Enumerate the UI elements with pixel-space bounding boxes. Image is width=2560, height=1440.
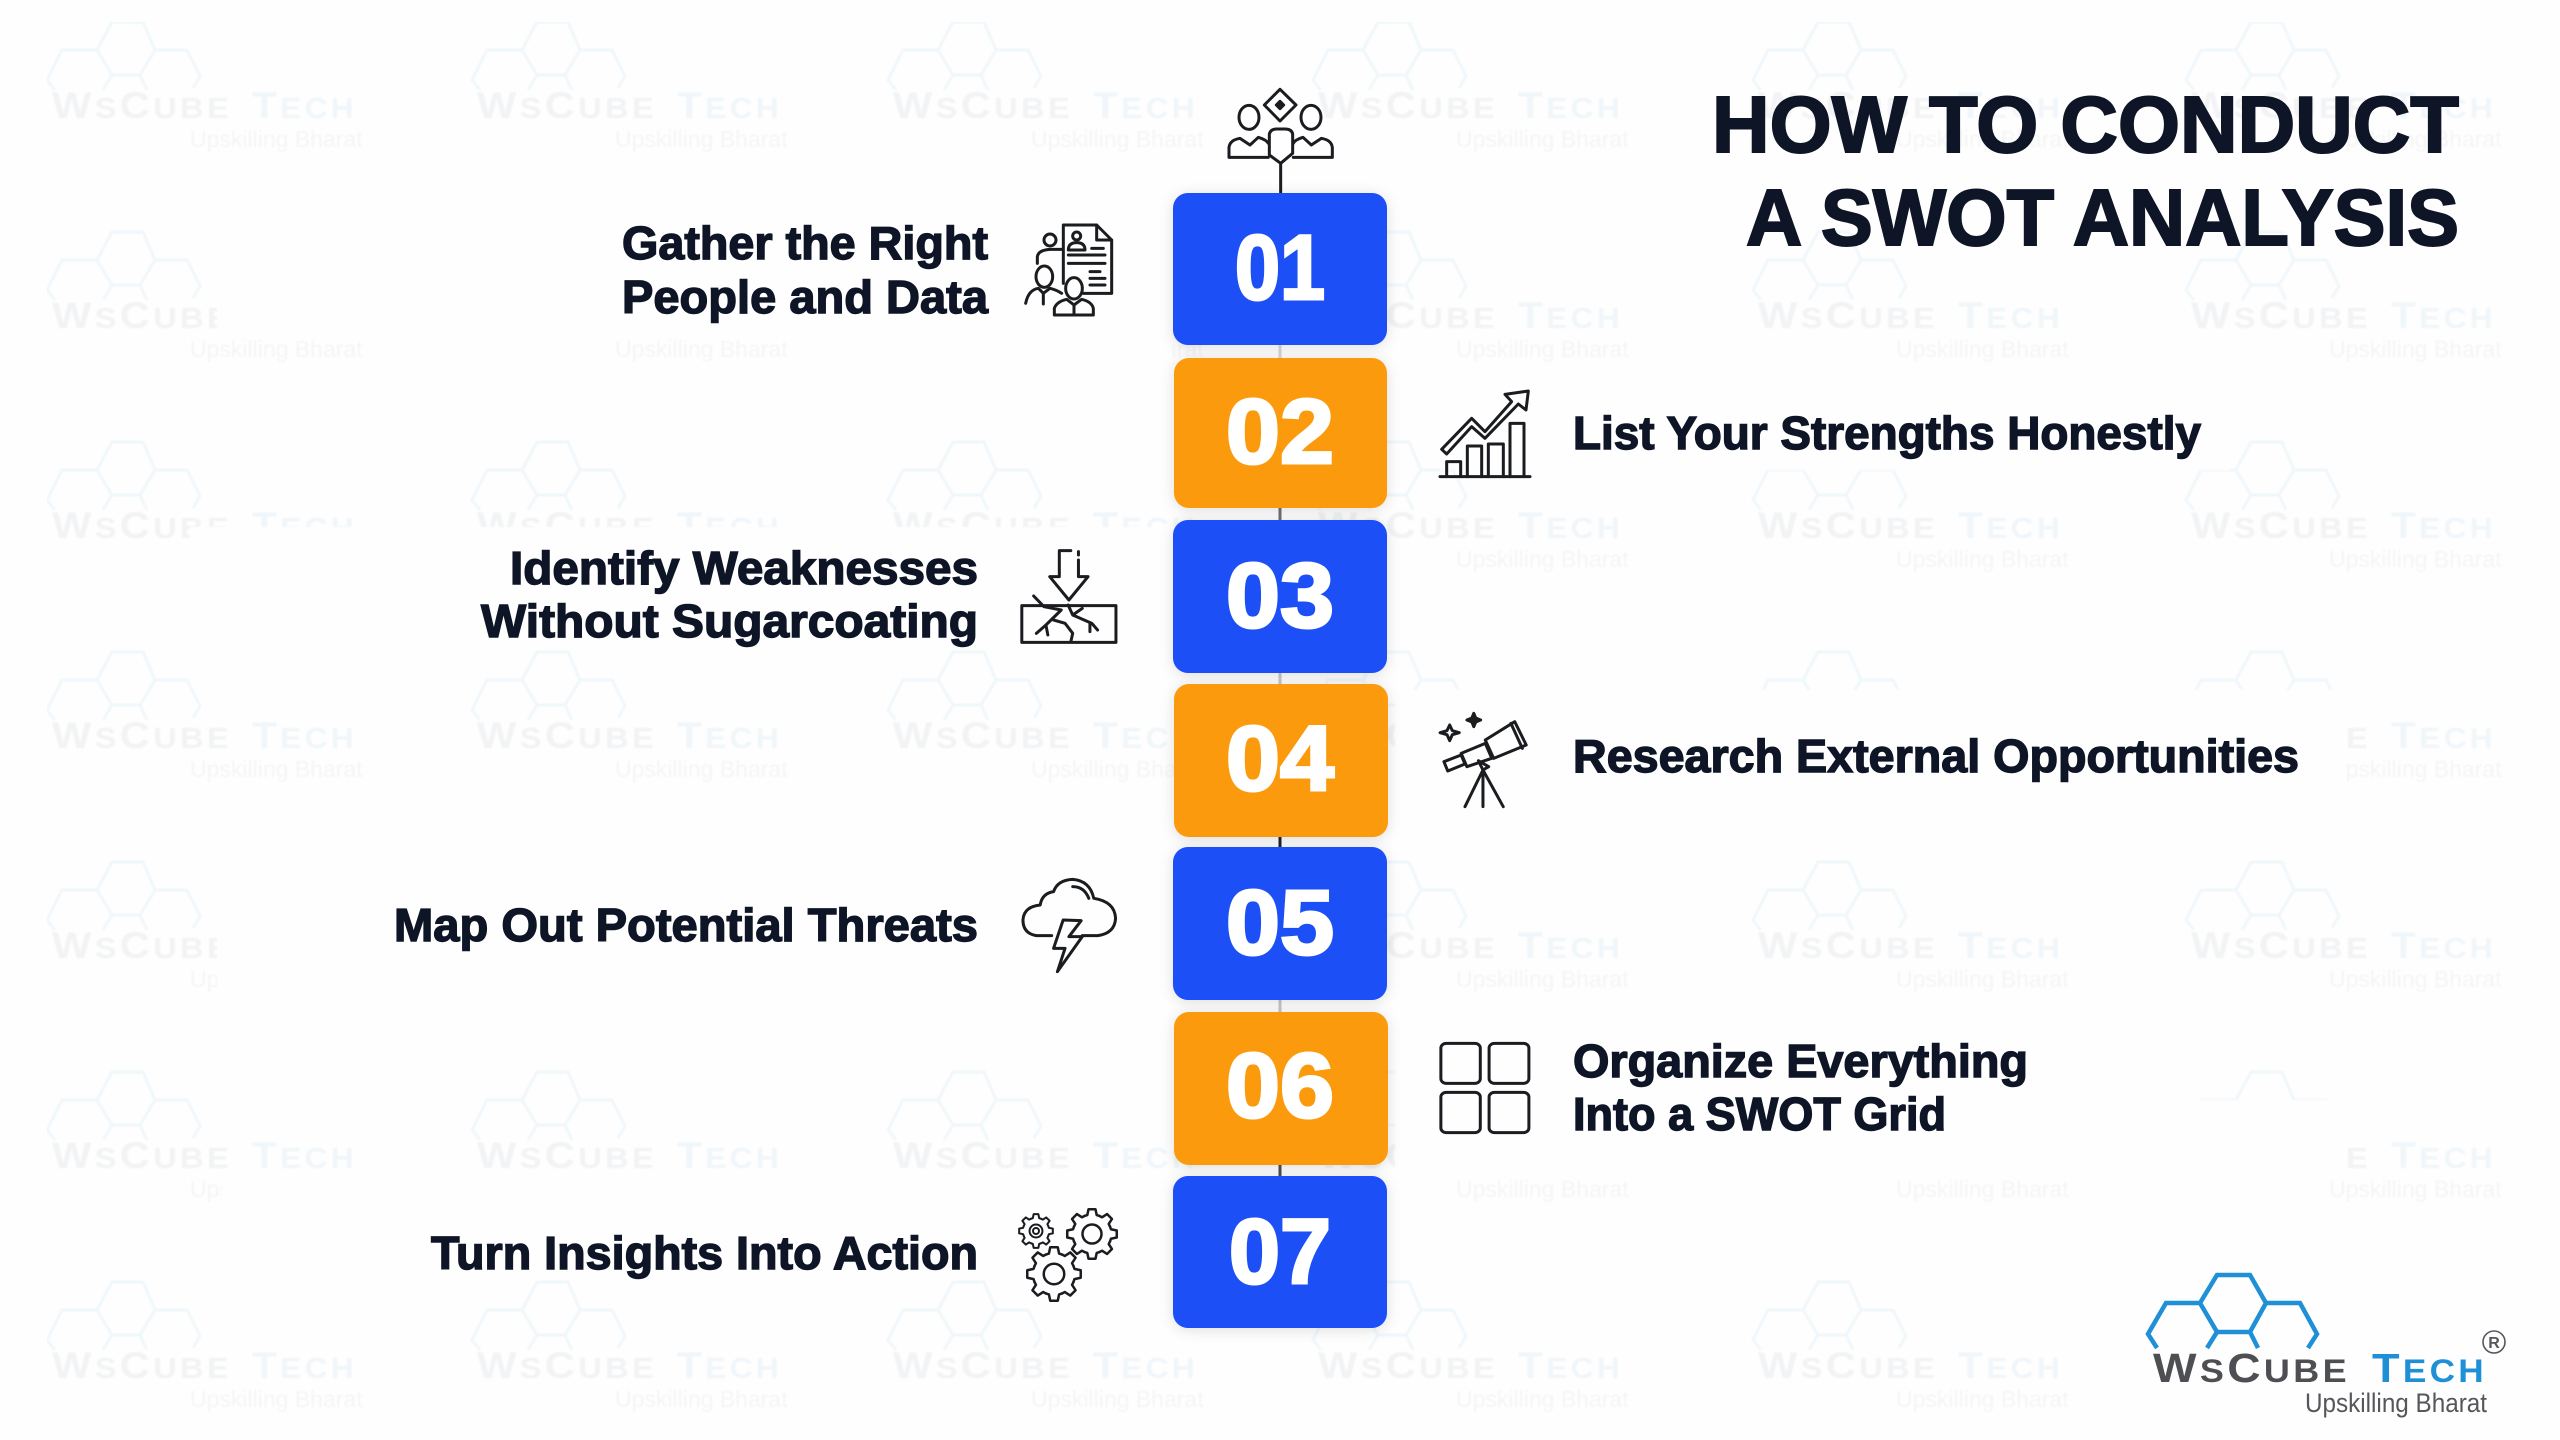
text: WSCUBE bbox=[52, 1345, 232, 1386]
step 02 box bbox=[1174, 358, 1387, 508]
text: Upskilling Bharat bbox=[190, 126, 363, 152]
text: WSCUBE bbox=[2191, 85, 2371, 126]
text: WSCUBE bbox=[893, 715, 1073, 756]
step 02 box: 02 bbox=[1226, 381, 1334, 483]
step 04 box: 04 bbox=[1226, 708, 1334, 810]
label: step 05: Map Out Potential Threats bbox=[394, 899, 978, 951]
text: WSCUBE bbox=[893, 1345, 1073, 1386]
text: WSCUBE bbox=[477, 85, 657, 126]
text: TECH bbox=[1518, 85, 1623, 126]
label: step 03: Identify Weaknesses bbox=[510, 542, 978, 594]
text: Upskilling Bharat bbox=[190, 756, 363, 782]
text: Upskilling Bharat bbox=[1896, 756, 2069, 782]
label: step 02: List Your Strengths Honestly bbox=[1573, 407, 2201, 459]
text: WSCUBE bbox=[1318, 1345, 1498, 1386]
text: WSCUBE bbox=[1318, 925, 1498, 966]
text: TECH bbox=[1518, 925, 1623, 966]
text: Upskilling Bharat bbox=[615, 546, 788, 572]
text: WSCUBE bbox=[1758, 295, 1938, 336]
text: TECH bbox=[1093, 925, 1198, 966]
text: TECH bbox=[1958, 505, 2063, 546]
text: Upskilling Bharat bbox=[2329, 336, 2502, 362]
text: Upskilling Bharat bbox=[1896, 336, 2069, 362]
step 06 box bbox=[1174, 1012, 1388, 1165]
text: TECH bbox=[1093, 1345, 1198, 1386]
logo: WsCube Tech: TECH bbox=[2372, 1345, 2487, 1391]
text: WSCUBE bbox=[893, 1135, 1073, 1176]
text: WSCUBE bbox=[1758, 505, 1938, 546]
label: step 06: Organize Everything bbox=[1573, 1035, 2028, 1087]
text: Upskilling Bharat bbox=[1456, 1386, 1629, 1412]
text: TECH bbox=[1093, 1135, 1198, 1176]
text: Upskilling Bharat bbox=[615, 966, 788, 992]
text: Upskilling Bharat bbox=[2329, 1386, 2502, 1412]
text: WSCUBE bbox=[2191, 925, 2371, 966]
text: WSCUBE bbox=[1758, 85, 1938, 126]
text: Upskilling Bharat bbox=[1456, 546, 1629, 572]
text: Upskilling Bharat bbox=[2329, 756, 2502, 782]
text: WSCUBE bbox=[1318, 1135, 1498, 1176]
text: WSCUBE bbox=[1758, 925, 1938, 966]
text: TECH bbox=[2391, 925, 2496, 966]
text: Upskilling Bharat bbox=[190, 336, 363, 362]
text: Upskilling Bharat bbox=[2329, 1176, 2502, 1202]
text: Upskilling Bharat bbox=[1031, 1176, 1204, 1202]
icon: team with diamond bbox=[1229, 89, 1332, 193]
text: WSCUBE bbox=[1318, 715, 1498, 756]
text: TECH bbox=[677, 295, 782, 336]
text: Upskilling Bharat bbox=[1896, 1386, 2069, 1412]
text: WSCUBE bbox=[2191, 1345, 2371, 1386]
step 01 box: 01 bbox=[1235, 217, 1325, 319]
text: WSCUBE bbox=[477, 715, 657, 756]
text: TECH bbox=[677, 505, 782, 546]
text: TECH bbox=[2391, 505, 2496, 546]
text: Upskilling Bharat bbox=[2329, 126, 2502, 152]
text: TECH bbox=[677, 715, 782, 756]
text: WSCUBE bbox=[52, 505, 232, 546]
text: TECH bbox=[2391, 1135, 2496, 1176]
text: Upskilling Bharat bbox=[615, 1386, 788, 1412]
text: WSCUBE bbox=[52, 925, 232, 966]
label: step 03 bbox=[481, 542, 978, 647]
text: WSCUBE bbox=[893, 925, 1073, 966]
text: WSCUBE bbox=[1318, 295, 1498, 336]
label: step 07: Turn Insights Into Action bbox=[431, 1227, 978, 1279]
step 05 box bbox=[1173, 847, 1387, 1000]
text: Upskilling Bharat bbox=[615, 756, 788, 782]
step 07 box: 07 bbox=[1229, 1201, 1331, 1303]
text: Upskilling Bharat bbox=[1456, 966, 1629, 992]
text: WSCUBE bbox=[893, 295, 1073, 336]
label: step 01: People and Data bbox=[622, 271, 988, 323]
text: WSCUBE bbox=[1758, 1135, 1938, 1176]
text: TECH bbox=[252, 295, 357, 336]
text: TECH bbox=[252, 505, 357, 546]
text: WSCUBE bbox=[1318, 505, 1498, 546]
step 06 box: 06 bbox=[1226, 1035, 1334, 1137]
text: TECH bbox=[2391, 85, 2496, 126]
label: step 06 bbox=[1573, 1035, 2028, 1140]
text: TECH bbox=[677, 1135, 782, 1176]
text: Upskilling Bharat bbox=[1896, 546, 2069, 572]
text: Upskilling Bharat bbox=[190, 966, 363, 992]
text: WSCUBE bbox=[477, 295, 657, 336]
logo: WsCube Tech: R bbox=[2488, 1335, 2500, 1352]
text: TECH bbox=[1093, 505, 1198, 546]
step 07 box bbox=[1173, 1176, 1387, 1328]
step 03 box: 03 bbox=[1226, 545, 1334, 647]
text: WSCUBE bbox=[2191, 1135, 2371, 1176]
text: WSCUBE bbox=[52, 715, 232, 756]
step 05 box: 05 bbox=[1226, 872, 1334, 974]
label: step 06: Into a SWOT Grid bbox=[1573, 1088, 1946, 1140]
text: TECH bbox=[1518, 715, 1623, 756]
text: Upskilling Bharat bbox=[1031, 546, 1204, 572]
title: A SWOT ANALYSIS bbox=[1746, 173, 2459, 262]
text: TECH bbox=[252, 1345, 357, 1386]
text: WSCUBE bbox=[477, 925, 657, 966]
label: step 04: Research External Opportunities bbox=[1573, 730, 2299, 782]
text: Upskilling Bharat bbox=[1031, 1386, 1204, 1412]
text: TECH bbox=[1093, 715, 1198, 756]
icon: arrow cracking a block bbox=[1022, 551, 1116, 642]
title bbox=[1712, 80, 2459, 262]
label: step 01: Gather the Right bbox=[622, 217, 988, 269]
icon: people with document bbox=[1026, 225, 1112, 315]
text: Upskilling Bharat bbox=[615, 1176, 788, 1202]
text: TECH bbox=[2391, 1345, 2496, 1386]
text: TECH bbox=[1093, 295, 1198, 336]
text: WSCUBE bbox=[477, 1135, 657, 1176]
text: Upskilling Bharat bbox=[1456, 756, 1629, 782]
text: TECH bbox=[1958, 1135, 2063, 1176]
text: TECH bbox=[1518, 295, 1623, 336]
text: TECH bbox=[677, 1345, 782, 1386]
icon: rising chart bbox=[1440, 391, 1530, 477]
text: WSCUBE bbox=[2191, 505, 2371, 546]
text: Upskilling Bharat bbox=[2329, 546, 2502, 572]
icon: telescope and stars bbox=[1440, 713, 1526, 807]
text: Upskilling Bharat bbox=[2329, 966, 2502, 992]
text: Upskilling Bharat bbox=[1031, 126, 1204, 152]
step 03 box bbox=[1173, 520, 1387, 673]
text: TECH bbox=[2391, 295, 2496, 336]
text: TECH bbox=[677, 925, 782, 966]
text: TECH bbox=[2391, 715, 2496, 756]
text: TECH bbox=[1093, 85, 1198, 126]
text: Upskilling Bharat bbox=[1896, 126, 2069, 152]
text: WSCUBE bbox=[893, 505, 1073, 546]
text: TECH bbox=[1518, 1345, 1623, 1386]
text: TECH bbox=[1958, 85, 2063, 126]
logo: WsCube Tech: Upskilling Bharat bbox=[2305, 1388, 2487, 1418]
text: WSCUBE bbox=[1758, 1345, 1938, 1386]
text: WSCUBE bbox=[1318, 85, 1498, 126]
logo: WsCube Tech: WSCUBE bbox=[2153, 1345, 2350, 1391]
title: HOW TO CONDUCT bbox=[1712, 80, 2459, 169]
text: TECH bbox=[1518, 505, 1623, 546]
text: TECH bbox=[1518, 1135, 1623, 1176]
text: Upskilling Bharat bbox=[1896, 1176, 2069, 1202]
text: TECH bbox=[252, 85, 357, 126]
text: TECH bbox=[252, 715, 357, 756]
text: WSCUBE bbox=[477, 1345, 657, 1386]
text: Upskilling Bharat bbox=[1456, 1176, 1629, 1202]
label: step 01 bbox=[622, 217, 988, 323]
label: step 03: Without Sugarcoating bbox=[481, 595, 978, 647]
text: TECH bbox=[252, 1135, 357, 1176]
text: TECH bbox=[1958, 1345, 2063, 1386]
step 04 box bbox=[1174, 684, 1388, 837]
text: Upskilling Bharat bbox=[1031, 756, 1204, 782]
text: WSCUBE bbox=[52, 1135, 232, 1176]
text: TECH bbox=[252, 925, 357, 966]
text: WSCUBE bbox=[1758, 715, 1938, 756]
text: WSCUBE bbox=[477, 505, 657, 546]
text: Upskilling Bharat bbox=[1456, 126, 1629, 152]
text: WSCUBE bbox=[893, 85, 1073, 126]
text: TECH bbox=[677, 85, 782, 126]
text: Upskilling Bharat bbox=[190, 546, 363, 572]
text: Upskilling Bharat bbox=[1031, 966, 1204, 992]
logo: WsCube Tech bbox=[2148, 1275, 2505, 1418]
icon: four-square grid bbox=[1441, 1043, 1529, 1133]
icon: storm cloud bbox=[1023, 879, 1116, 972]
text: Upskilling Bharat bbox=[1456, 336, 1629, 362]
text: Upskilling Bharat bbox=[190, 1176, 363, 1202]
step 01 box bbox=[1173, 193, 1387, 345]
text: TECH bbox=[1958, 295, 2063, 336]
text: Upskilling Bharat bbox=[615, 126, 788, 152]
text: WSCUBE bbox=[52, 295, 232, 336]
icon: gears bbox=[1019, 1209, 1117, 1301]
text: TECH bbox=[1958, 715, 2063, 756]
text: Upskilling Bharat bbox=[190, 1386, 363, 1412]
text: WSCUBE bbox=[2191, 715, 2371, 756]
text: Upskilling Bharat bbox=[615, 336, 788, 362]
text: Upskilling Bharat bbox=[1896, 966, 2069, 992]
text: TECH bbox=[1958, 925, 2063, 966]
text: Upskilling Bharat bbox=[1031, 336, 1204, 362]
text: WSCUBE bbox=[52, 85, 232, 126]
text: WSCUBE bbox=[2191, 295, 2371, 336]
